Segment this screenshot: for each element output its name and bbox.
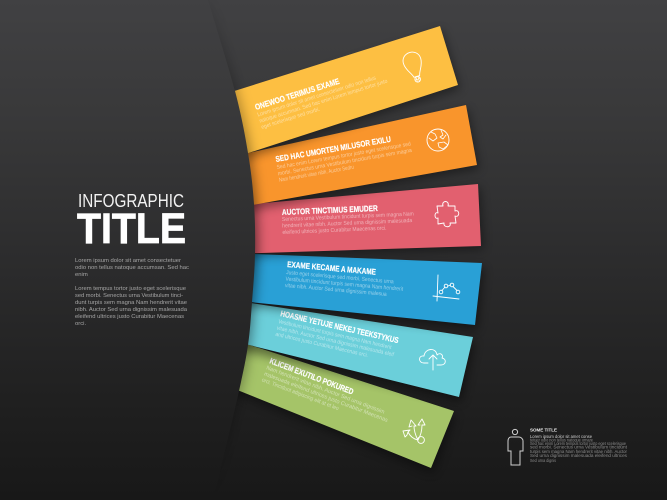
heading: green: KLICEM EXUTILO POKURED	[268, 356, 355, 396]
body: green: malesuada eleifend ultrices justo Curabitur Maecenas	[263, 371, 389, 424]
body: pink: eleifend ultrices justo Curabitur Maecenas orci.	[282, 226, 387, 236]
callout text: Sed hac enim Lorem tempus tortor justo eget scelerisque	[530, 441, 627, 446]
callout text: SOME TITLE	[530, 428, 557, 432]
callout text	[530, 428, 628, 463]
left text block: orci.	[75, 321, 86, 327]
heading: pink: AUCTOR TINCTIMUS EMUDER	[282, 204, 378, 217]
body: orange: morbi. Senectus urna Vestibulum tincidunt turpis sem magna	[277, 148, 413, 177]
left text block: eleifend ultrices justo Curabitur Maecenas	[75, 314, 184, 320]
body: teal: Vestibulum tincidunt turpis sem magna Nam hendrerit	[278, 319, 392, 351]
left text block: enim	[75, 272, 88, 278]
icon: puzzle piece	[435, 202, 459, 227]
body: teal: and ultrices justo Curabitur Maecenas orci.	[275, 332, 369, 359]
icon: person	[508, 429, 523, 465]
strip 1: yellow	[228, 26, 460, 160]
body: pink: Senectus urna Vestibulum tincidunt turpis sem magna Nam	[282, 211, 414, 223]
title: TITLE	[77, 205, 186, 253]
strip 3: pink	[230, 184, 483, 257]
strip 5: teal	[225, 299, 475, 402]
person callout	[508, 428, 628, 465]
left panel shadow	[2, 0, 257, 500]
strip 2: orange	[230, 105, 479, 212]
icon: globe	[427, 129, 449, 151]
title: INFOGRAPHIC	[78, 191, 184, 211]
strip 4: blue	[230, 253, 484, 330]
body: yellow: eget scelerisque sed morbi.	[261, 107, 321, 131]
body: blue: vitae nibh. Auctor Sed urna dignissim malesua	[285, 283, 388, 298]
callout text: turpis sem magna Nam hendrerit vitae nibh. Auctor	[530, 449, 628, 454]
body: green: orci. Tincidunt adipiscing elit at et leo	[261, 377, 339, 412]
body: yellow: natoque accumsan. Sed hac enim Lorem tempus tortor justo	[259, 79, 388, 125]
icon: line chart	[433, 275, 460, 301]
strip 6: green	[215, 337, 456, 473]
heading: orange: SED HAC UMORTEN MILUSOR EXILU	[275, 135, 392, 164]
callout text: sed morbi. Senectus urna Vestibulum tincidunt	[530, 444, 628, 450]
body: orange: Sed hac enim Lorem tempus tortor justo eget scelerisque sed	[276, 141, 411, 171]
left text block: Lorem ipsum dolor sit amet consectetuer	[75, 258, 181, 264]
callout text: Sed urna dignissim malesuada eleifend ultrices	[530, 453, 627, 458]
left text block: nibh. Auctor Sed urna dignissim malesuada	[75, 307, 188, 313]
left text block	[75, 258, 189, 327]
left text block: odio non tellus natoque accumsan. Sed hac	[75, 265, 189, 271]
body: green: Nam hendrerit vitae nibh. Auctor Sed urna dignissim	[265, 365, 386, 416]
callout text: tetuer odio non tellus natoque ornare	[530, 438, 594, 442]
left text block: sed morbi. Senectus urna Vestibulum tinci-	[75, 293, 183, 299]
left panel	[0, 0, 255, 500]
body: blue: Justo eget scelerisque sed morbi. Senectus urna	[286, 270, 395, 285]
heading: blue: EXAME KECAME A MAKAME	[287, 260, 377, 277]
body: blue: Vestibulum tincidunt turpis sem magna Nam hendrerit	[285, 276, 404, 293]
icon: light bulb	[401, 50, 427, 85]
left text block: Lorem tempus tortor justo eget scelerisque	[75, 286, 187, 292]
callout text: Lorem ipsum dolor sit amet conse	[530, 434, 593, 439]
heading: yellow: ONEWOO TERIMUS EXAME	[254, 77, 341, 112]
body: teal: vitae nibh. Auctor Sed urna dignissim malesuada eleif	[276, 325, 395, 358]
left text block: dunt turpis sem magna Nam hendrerit vitae	[75, 300, 188, 306]
icon: cloud upload	[420, 349, 445, 370]
heading: teal: HOASNE YETUJE NEKEJ TEEKSTYKUS	[280, 309, 400, 345]
callout text: Sed urna dignis	[530, 458, 556, 463]
icon: plant arrows	[403, 419, 425, 443]
body: pink: hendrerit vitae nibh. Auctor Sed urna dignissim malesuada	[282, 218, 413, 229]
body: orange: Nam hendrerit vitae nibh. Auctor Sedru	[279, 165, 354, 184]
body: yellow: Lorem ipsum dolor sit amet consectetuer odio non tellus	[257, 75, 377, 118]
